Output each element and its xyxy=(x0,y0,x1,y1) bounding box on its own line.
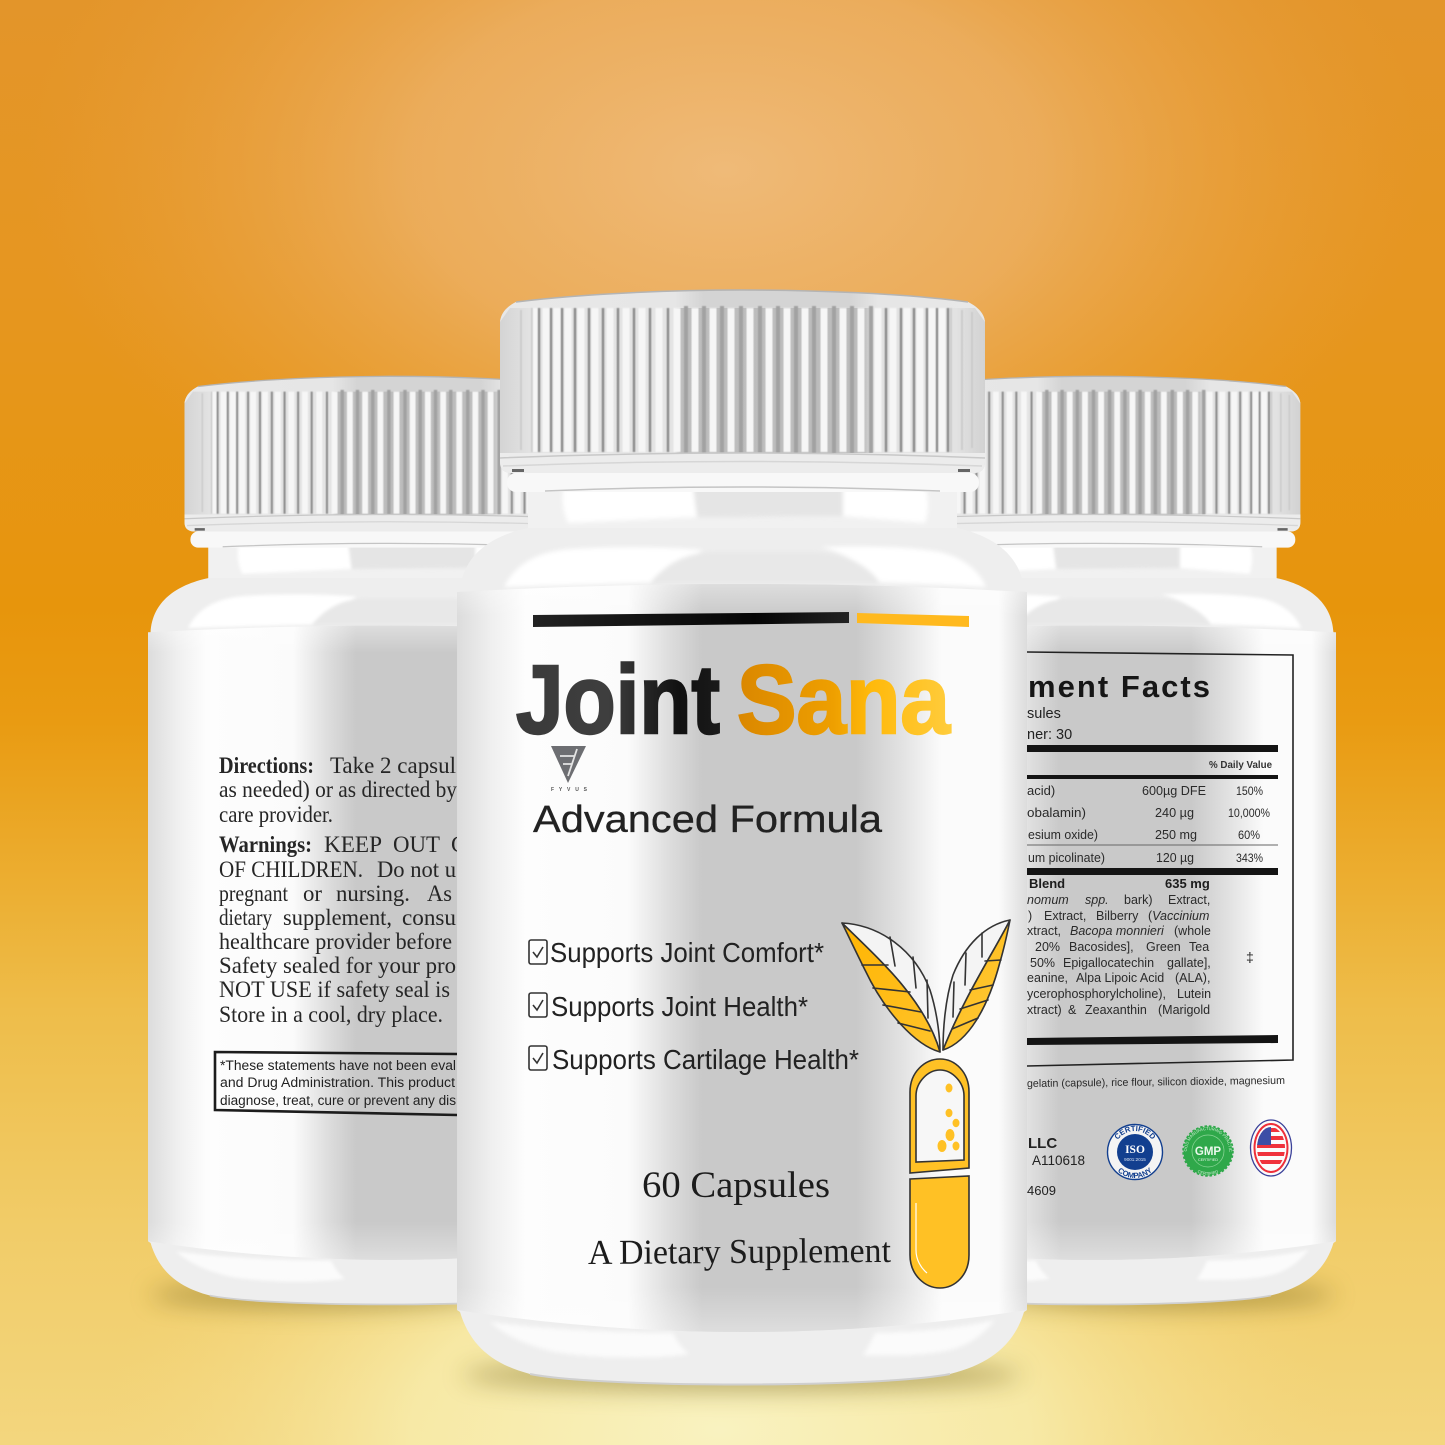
icon: GMP badge xyxy=(1182,1125,1234,1177)
proprietary blend ingredients: Vaccinium xyxy=(1152,909,1209,923)
icon: GMP badge: GOOD MANUFACTURING PRACTICE xyxy=(1184,1127,1232,1152)
panel: directions and warnings text: healthcare provider before xyxy=(219,929,452,954)
panel: directions and warnings text: care provider. xyxy=(219,802,333,827)
proprietary blend ingredients: Epigallocatechin xyxy=(1063,956,1154,970)
benefit 2 text: Supports Joint Health* xyxy=(551,991,808,1022)
icon: GMP badge: CERTIFIED xyxy=(1198,1170,1218,1175)
title: Joint Sana: Sana xyxy=(737,645,951,754)
ground shadows xyxy=(150,1281,1335,1391)
icon: twin leaves xyxy=(842,920,1010,1052)
proprietary blend ingredients: Blend xyxy=(1029,876,1065,891)
icon: checkbox 1 xyxy=(529,940,547,964)
nutrient table rows: 120 µg xyxy=(1156,850,1194,865)
proprietary blend ingredients: Bacosides], xyxy=(1069,940,1134,954)
right bottle xyxy=(853,376,1336,1304)
nutrient table rows: 60% xyxy=(1238,828,1260,842)
nutrient table rows: obalamin) xyxy=(1027,805,1086,820)
nutrient table rows xyxy=(1027,783,1270,865)
panel: FDA disclaimer box: diagnose, treat, cure or prevent any dis xyxy=(220,1093,456,1108)
panel: FDA disclaimer box xyxy=(215,1052,457,1115)
title: Joint Sana: Joint xyxy=(516,645,720,754)
top label bars xyxy=(533,612,969,627)
proprietary blend ingredients: spp. xyxy=(1085,893,1109,907)
proprietary blend ingredients: (ALA), xyxy=(1175,971,1210,985)
benefit 1 text: Supports Joint Comfort* xyxy=(550,937,824,968)
proprietary blend ingredients: ) xyxy=(1028,909,1032,923)
panel: directions and warnings text: as needed) or as directed by xyxy=(219,777,457,802)
icon: FYVUS logo: FYVUS xyxy=(551,787,588,793)
manufacturer details: 4609 xyxy=(1027,1183,1056,1198)
icon: ISO badge: CERTIFIED xyxy=(1114,1126,1155,1139)
manufacturer details: LLC xyxy=(1028,1135,1057,1152)
panel: directions and warnings text: nursing. xyxy=(336,881,410,906)
panel: directions and warnings text: Warnings: xyxy=(219,832,312,857)
panel: directions and warnings text: OF CHILDREN. xyxy=(219,857,363,882)
icon: checkbox 3 xyxy=(529,1046,547,1070)
icon: GMP badge: CERTIFIED xyxy=(1198,1158,1218,1162)
nutrient table rows: 343% xyxy=(1236,851,1263,865)
panel: FDA disclaimer box: *These statements have not been eval xyxy=(220,1058,456,1073)
nutrient table rows: esium oxide) xyxy=(1028,827,1098,842)
front bottle xyxy=(457,290,1027,1384)
capsule count: 60 Capsules xyxy=(642,1165,830,1206)
panel: directions and warnings text: Store in a cool, dry place. xyxy=(219,1002,443,1027)
proprietary blend ingredients: xtract, xyxy=(1027,924,1061,938)
panel: directions and warnings text: NOT USE if safety seal is xyxy=(219,977,450,1002)
nutrient table rows: 240 µg xyxy=(1155,805,1194,820)
panel: directions and warnings text: Do not u xyxy=(377,857,456,882)
icon: capsule xyxy=(910,1059,969,1288)
panel: FDA disclaimer box: and Drug Administration. This product xyxy=(220,1075,455,1090)
panel: directions and warnings text: supplement, xyxy=(283,905,392,930)
icon: FYVUS logo xyxy=(551,746,588,793)
proprietary blend ingredients: Zeaxanthin xyxy=(1085,1003,1147,1017)
panel: directions and warnings text: consu xyxy=(402,905,456,930)
serving size lines: ner: 30 xyxy=(1027,727,1072,743)
dietary supplement line: A Dietary Supplement xyxy=(588,1231,891,1272)
proprietary blend ingredients: 20% xyxy=(1035,940,1060,954)
icon: ISO badge: ISO xyxy=(1125,1144,1145,1156)
nutrient table rows: 150% xyxy=(1236,784,1263,798)
proprietary blend ingredients: Green xyxy=(1146,940,1181,954)
icon: ISO badge: COMPANY xyxy=(1118,1167,1151,1178)
panel: directions and warnings text: or xyxy=(303,881,322,906)
panel: directions and warnings text: Directions: xyxy=(219,753,314,778)
proprietary blend ingredients: & xyxy=(1068,1003,1077,1017)
proprietary blend ingredients: xtract) xyxy=(1027,1003,1062,1017)
panel: directions and warnings text: Safety sealed for your pro xyxy=(219,953,456,978)
daily value header: % Daily Value xyxy=(1209,759,1272,771)
proprietary blend ingredients: ( xyxy=(1148,909,1153,923)
nutrient table rows: 250 mg xyxy=(1155,827,1197,842)
panel: supplement facts xyxy=(1027,652,1293,1066)
nutrient table rows: 10,000% xyxy=(1228,806,1270,820)
nutrient table rows: acid) xyxy=(1027,783,1055,798)
icon: checkbox 2 xyxy=(529,993,547,1017)
proprietary blend ingredients: 50% xyxy=(1030,956,1055,970)
proprietary blend ingredients: Tea xyxy=(1189,940,1209,954)
subtitle: advanced formula: Advanced Formula xyxy=(533,799,883,841)
manufacturer details: A110618 xyxy=(1032,1153,1085,1168)
icon: GMP badge: GMP xyxy=(1195,1146,1221,1158)
proprietary blend ingredients: Extract, xyxy=(1044,909,1086,923)
proprietary blend ingredients: ‡ xyxy=(1246,949,1254,965)
nutrient table rows: 600µg DFE xyxy=(1142,783,1206,798)
panel: directions and warnings text: KEEP xyxy=(324,832,382,857)
nutrient table rows: um picolinate) xyxy=(1028,850,1105,865)
manufacturer details xyxy=(1027,1135,1085,1198)
other ingredients text: gelatin (capsule), rice flour, silicon dioxide, magnesium xyxy=(1027,1075,1285,1090)
panel: directions and warnings text: pregnant xyxy=(219,881,289,906)
proprietary blend ingredients: eanine, xyxy=(1027,971,1068,985)
proprietary blend ingredients: gallate], xyxy=(1167,956,1211,970)
icon: american flag badge xyxy=(1250,1120,1292,1176)
proprietary blend ingredients: Bilberry xyxy=(1096,909,1139,923)
panel: directions and warnings text: dietary xyxy=(219,905,272,930)
title: Joint Sana xyxy=(516,645,951,754)
benefits checklist xyxy=(529,937,859,1075)
icon: ISO badge: 9001:2015 xyxy=(1124,1157,1146,1162)
proprietary blend ingredients: nomum xyxy=(1027,893,1069,907)
proprietary blend ingredients: ycerophosphorylcholine), xyxy=(1027,987,1166,1001)
proprietary blend ingredients: Bacopa monnieri xyxy=(1070,924,1165,938)
icon: ISO badge xyxy=(1106,1124,1164,1180)
serving size lines: sules xyxy=(1027,706,1061,722)
proprietary blend ingredients xyxy=(1027,876,1254,1017)
proprietary blend ingredients: Lutein xyxy=(1177,987,1211,1001)
serving size lines xyxy=(1027,706,1072,743)
panel: directions and warnings text: OUT xyxy=(393,832,440,857)
panel: directions and warnings text xyxy=(219,753,466,1027)
heading: supplement facts: ment Facts xyxy=(1028,669,1210,704)
panel: directions and warnings text: C xyxy=(451,832,466,857)
benefit 3 text: Supports Cartilage Health* xyxy=(552,1044,859,1075)
proprietary blend ingredients: Extract, xyxy=(1168,893,1210,907)
proprietary blend ingredients: (Marigold xyxy=(1158,1003,1210,1017)
proprietary blend ingredients: (whole xyxy=(1174,924,1211,938)
proprietary blend ingredients: 635 mg xyxy=(1165,876,1210,891)
proprietary blend ingredients: bark) xyxy=(1124,893,1152,907)
panel: directions and warnings text: As xyxy=(427,881,452,906)
proprietary blend ingredients: Alpa Lipoic Acid xyxy=(1076,971,1164,985)
left bottle xyxy=(148,376,631,1304)
panel: directions and warnings text: Take 2 capsul xyxy=(330,753,456,778)
